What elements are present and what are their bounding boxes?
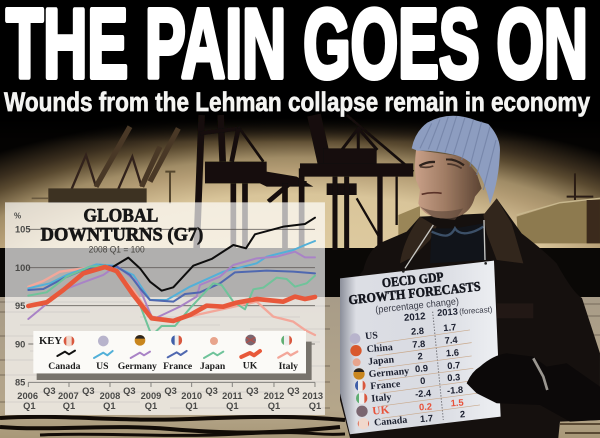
- coat pocket: [497, 303, 533, 318]
- x axis labels: [17, 386, 323, 411]
- table rows: 2.8: [411, 326, 424, 337]
- man wearing a sign: [340, 116, 600, 438]
- x axis labels: 2013: [302, 391, 323, 401]
- x axis labels: Q3: [205, 386, 218, 396]
- table rows: -2.4: [415, 388, 432, 399]
- x axis labels: 2011: [222, 391, 242, 401]
- legend key: US: [96, 361, 109, 372]
- table rows: -1.8: [447, 385, 463, 396]
- main cranes silhouette: [150, 115, 413, 250]
- x axis labels: 2007: [58, 391, 79, 401]
- table rows: 2: [460, 409, 465, 419]
- sign title: OECD GDP: [381, 269, 444, 290]
- table rows: 1.7: [420, 413, 433, 424]
- x axis labels: Q1: [185, 401, 198, 411]
- x axis labels: Q1: [226, 401, 239, 411]
- legend key: Canada: [48, 361, 81, 372]
- y axis labels: 85: [15, 378, 25, 388]
- table rows: 0.3: [447, 372, 461, 383]
- table rows: France: [370, 379, 401, 392]
- legend key: Italy: [279, 361, 298, 372]
- table rows: 7.4: [444, 335, 459, 346]
- x axis labels: Q3: [287, 386, 300, 396]
- y axis labels: 100: [15, 263, 31, 273]
- face: [415, 150, 482, 219]
- chart title: GLOBAL: [83, 206, 158, 227]
- y axis labels: 90: [15, 339, 25, 349]
- x axis labels: 2010: [181, 391, 202, 401]
- x axis labels: Q1: [103, 401, 116, 411]
- x axis labels: Q1: [309, 401, 321, 411]
- table rows: 0.2: [419, 402, 432, 412]
- x axis labels: 2006: [17, 391, 38, 401]
- x axis labels: Q3: [82, 386, 95, 396]
- table rows: 7.8: [412, 339, 426, 350]
- legend key: [33, 331, 312, 380]
- chart subtitle: 2008 Q1 = 100: [89, 244, 145, 254]
- legend key: France: [163, 361, 193, 372]
- table rows: 1.5: [450, 398, 464, 408]
- table divider: [433, 312, 443, 420]
- jumper: [430, 223, 487, 263]
- coat: [340, 198, 600, 438]
- sign title: GROWTH FORECASTS: [348, 279, 481, 307]
- distant cranes: [32, 127, 160, 203]
- gridlines: [28, 229, 315, 387]
- x axis labels: Q1: [268, 401, 280, 411]
- x axis labels: Q3: [43, 386, 56, 396]
- table rows: Germany: [368, 366, 410, 380]
- legend key: Germany: [118, 361, 157, 372]
- x axis labels: Q3: [123, 386, 136, 396]
- string: [405, 220, 485, 268]
- legend key: KEY: [39, 336, 62, 347]
- table rows: [365, 322, 465, 429]
- table rows: 0.9: [415, 363, 428, 374]
- table headers: 2012: [404, 311, 426, 324]
- x axis labels: Q1: [63, 401, 75, 411]
- x axis labels: 2008: [100, 391, 120, 401]
- table rows: US: [365, 330, 379, 342]
- table rows: 2: [417, 351, 423, 361]
- x axis labels: Q3: [164, 386, 177, 396]
- x axis labels: 2012: [264, 391, 284, 401]
- table rows: Japan: [368, 354, 395, 368]
- table headers: 2013: [437, 307, 458, 318]
- right crane: [314, 115, 325, 165]
- collar: [400, 198, 523, 263]
- x axis labels: 2009: [141, 391, 161, 401]
- y axis labels: 95: [15, 301, 25, 311]
- table headers: [404, 305, 493, 324]
- line chart: G7 series: [28, 218, 315, 336]
- x axis labels: Q3: [246, 386, 259, 396]
- x axis labels: Q1: [145, 401, 157, 411]
- table rows: 1.7: [443, 322, 457, 333]
- y axis labels: [14, 211, 31, 388]
- hat: [412, 116, 500, 204]
- legend key: Japan: [200, 361, 226, 372]
- table rows: Canada: [374, 415, 408, 429]
- chart title: DOWNTURNS (G7): [41, 225, 203, 246]
- sign board: [340, 261, 501, 434]
- x axis labels: Q1: [23, 401, 36, 411]
- glove and sleeve: [467, 353, 600, 422]
- table headers: (forecast): [459, 305, 493, 316]
- flags: [350, 333, 369, 429]
- y axis labels: %: [14, 211, 21, 220]
- legend key: UK: [243, 360, 258, 371]
- table rows: Italy: [371, 392, 392, 405]
- sign title: [348, 269, 481, 316]
- table rows: 0.7: [447, 360, 461, 371]
- chart title: [41, 206, 203, 246]
- tanks: [398, 173, 600, 243]
- table rows: 0: [420, 376, 426, 386]
- table rows: China: [366, 342, 393, 355]
- left crane: [197, 115, 223, 248]
- y axis labels: 105: [15, 225, 31, 235]
- chart panel: global downturns: [5, 202, 325, 415]
- sign title: (percentage change): [375, 296, 460, 316]
- table rows: UK: [372, 404, 390, 418]
- table rows: 1.6: [446, 348, 459, 358]
